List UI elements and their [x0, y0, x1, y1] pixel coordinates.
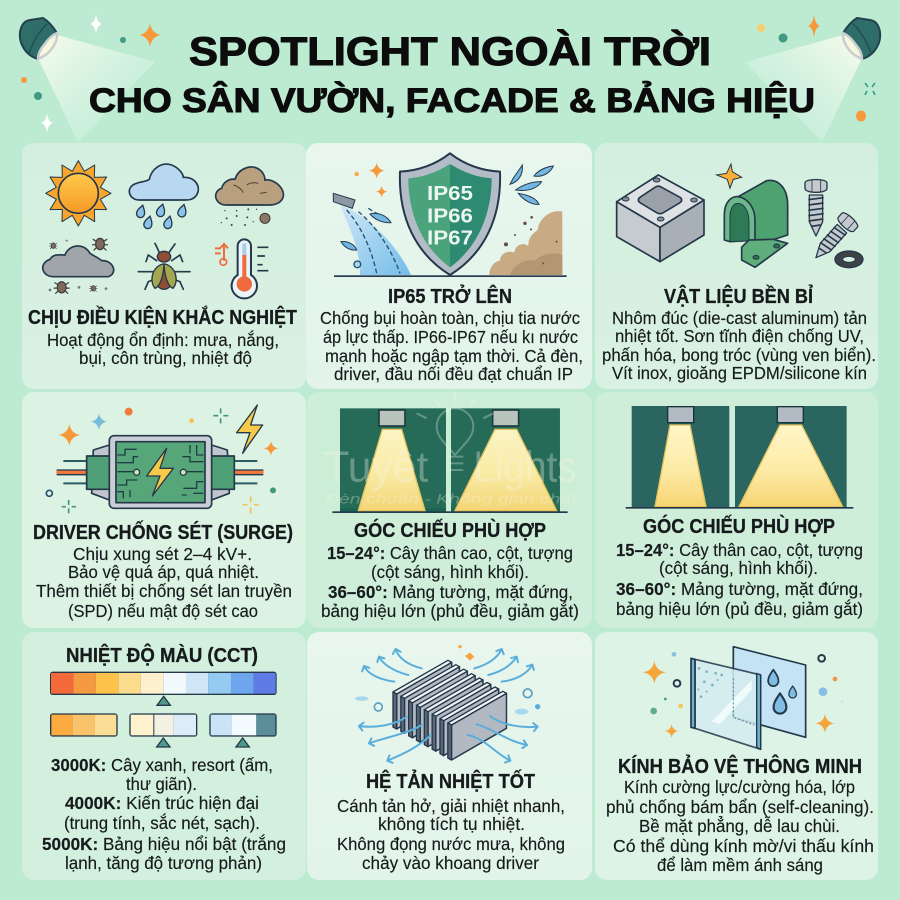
icon: shield	[400, 153, 500, 275]
watermark: Lights	[473, 443, 577, 492]
body text: để làm mềm ánh sáng	[657, 855, 823, 875]
body text: phấn hóa, bong tróc (vùng ven biển).	[602, 345, 876, 365]
body text	[321, 543, 579, 621]
body text	[320, 308, 583, 384]
body text: Chịu xung sét 2–4 kV+.	[73, 544, 252, 564]
icon: lightning bolt	[237, 405, 263, 453]
main color bar	[50, 672, 277, 705]
body text: không tích tụ nhiệt.	[378, 814, 525, 834]
icon: driver housing	[87, 436, 234, 508]
body text: lạnh, tăng độ tương phản)	[65, 853, 262, 873]
heading: VẬT LIỆU BỀN BỈ	[664, 284, 813, 308]
icon: shield: IP66	[427, 204, 473, 227]
body text: Bảo vệ quá áp, quá nhiệt.	[68, 562, 259, 582]
icon: shield: IP65	[427, 182, 473, 205]
body text: bảng hiệu lớn (phủ đều, giảm gắt)	[321, 600, 579, 621]
body text: Chống bụi hoàn toàn, chịu tia nước	[320, 308, 580, 328]
sparkles	[354, 163, 387, 197]
heading: KÍNH BẢO VỆ THÔNG MINH	[618, 754, 862, 778]
icon: star	[717, 164, 742, 188]
illustration: glass panes	[643, 647, 843, 749]
body text: thư giãn).	[126, 774, 197, 794]
body text: Hoạt động ổn định: mưa, nắng,	[47, 329, 279, 350]
watermark	[318, 392, 582, 508]
body text: áp lực thấp. IP66-IP67 nếu kı nước	[323, 327, 578, 347]
body text	[337, 796, 565, 873]
body text: Thêm thiết bị chống sét lan truyền	[36, 581, 292, 601]
sparkles left	[21, 13, 161, 133]
icon: dust mound	[489, 211, 562, 275]
body text	[602, 308, 876, 383]
title	[89, 28, 815, 120]
panel: IP rating	[306, 143, 592, 389]
icon: splash drops	[510, 165, 553, 204]
icon: back glass pane	[733, 647, 806, 737]
body text	[616, 540, 863, 619]
panel: durable materials	[595, 143, 878, 389]
left scene: narrow beam	[632, 406, 729, 507]
icon: gray cloud with pests	[43, 238, 114, 294]
CCT scale	[50, 672, 277, 747]
right scene: wide beam	[451, 408, 560, 512]
body text: 36–60°: Mảng tường, mặt đứng,	[328, 582, 573, 602]
illustration: materials	[617, 164, 863, 268]
heading: HỆ TẢN NHIỆT TỐT	[366, 769, 535, 793]
body text: Kính cường lực/cường hóa, lớp	[624, 777, 855, 797]
body text	[606, 777, 874, 875]
icon: sun	[46, 161, 111, 226]
body text: (trung tính, sắc nét, sạch).	[64, 812, 260, 833]
icon: center lightning	[147, 448, 173, 496]
illustration: driver	[46, 405, 278, 513]
body text: mạnh hoặc ngập tạm thời. Cả đèn,	[325, 346, 583, 366]
sparkles	[643, 652, 843, 738]
icon: right spotlight	[745, 18, 880, 142]
body text: 15–24°: Cây thân cao, cột, tượng	[327, 543, 573, 563]
icon: front glass pane	[691, 658, 761, 749]
decor: bubbles	[355, 645, 540, 715]
heading: GÓC CHIẾU PHÙ HỢP	[643, 514, 835, 538]
body text: 5000K: Bảng hiệu nổi bật (trắng	[42, 833, 286, 854]
heading: CHỊU ĐIỀU KIỆN KHẮC NGHIỆT	[28, 305, 297, 329]
body text: Vít inox, gioăng EPDM/silicone kín	[612, 363, 867, 383]
4000K bar	[129, 713, 197, 747]
body text: 3000K: Cây xanh, resort (ấm,	[51, 755, 273, 775]
left scene: narrow beam	[340, 408, 446, 512]
right scene: wide beam	[735, 406, 847, 507]
icon: dust cloud	[216, 167, 283, 226]
title: CHO SÂN VƯỜN, FACADE & BẢNG HIỆU	[89, 82, 815, 120]
body text: (cột sáng, hình khối).	[659, 558, 818, 578]
watermark: Tuyêt	[323, 443, 428, 492]
body text: 36–60°: Mảng tường, mặt đứng,	[616, 579, 863, 599]
body text: (cột sáng, hình khối).	[371, 562, 529, 582]
icon: wires	[57, 461, 263, 483]
body text: Không đọng nước mưa, không	[337, 834, 565, 854]
watermark: Đèn chuẩn - Không gian chất	[325, 490, 578, 506]
icon: shield: IP67	[427, 226, 473, 249]
icon: thermometer	[215, 239, 268, 298]
icon: heat sink fins	[393, 660, 506, 760]
panel: extreme conditions	[22, 143, 306, 389]
illustration: beam angles	[318, 392, 582, 513]
heading: NHIỆT ĐỘ MÀU (CCT)	[66, 643, 258, 667]
body text: driver, đầu nối đều đạt chuẩn IP	[334, 364, 573, 384]
body text	[36, 544, 292, 621]
panel: surge driver	[22, 392, 306, 628]
header decoration	[20, 13, 880, 142]
icon: screws	[805, 179, 863, 268]
body text: bụi, côn trùng, nhiệt độ	[79, 348, 252, 368]
sparkles right	[757, 14, 875, 122]
body text: Có thể dùng kính mờ/vi thấu kính	[613, 836, 874, 856]
body text: 15–24°: Cây thân cao, cột, tượng	[616, 540, 863, 560]
body text: (SPD) nếu mật độ sét cao	[68, 601, 258, 621]
icon: circuit traces	[117, 445, 203, 498]
body text: phủ chống bám bẩn (self-cleaning).	[606, 797, 874, 817]
body text: Bề mặt phẳng, dễ lau chùi.	[639, 815, 840, 836]
panel: beam angle with watermark	[307, 392, 592, 628]
title: SPOTLIGHT NGOÀI TRỜI	[189, 28, 711, 74]
illustration: heat sink	[355, 645, 540, 761]
heading: IP65 TRỞ LÊN	[388, 284, 512, 308]
5000K bar	[209, 713, 277, 747]
icon: rain cloud	[129, 164, 198, 229]
body text: bảng hiệu lớn (pủ đều, giảm gắt)	[616, 598, 863, 619]
illustration: IP shield with water and dust	[333, 153, 567, 277]
illustration: beam angles	[626, 406, 853, 509]
panel: color temperature	[22, 632, 306, 880]
panel: beam angle	[595, 392, 878, 628]
sparkles	[46, 408, 278, 513]
icon: die-cast block	[617, 175, 704, 262]
heading: DRIVER CHỐNG SÉT (SURGE)	[33, 520, 293, 544]
icon: left spotlight	[20, 18, 155, 142]
body text	[42, 755, 286, 873]
body text: Nhôm đúc (die-cast aluminum) tản	[612, 308, 867, 328]
icon: green bracket	[724, 180, 788, 267]
icon: beetle	[138, 243, 190, 289]
body text: 4000K: Kiến trúc hiện đại	[65, 793, 259, 813]
icons: weather set	[43, 161, 283, 298]
heading: GÓC CHIẾU PHÙ HỢP	[354, 518, 546, 542]
panel: heat sink	[307, 632, 592, 880]
body text	[47, 329, 279, 368]
icon: water jet	[333, 193, 411, 275]
3000K bar	[50, 713, 118, 737]
icon: airflow arrows	[359, 649, 538, 761]
body text: nhiệt tốt. Sơn tĩnh điện chống UV,	[615, 326, 864, 346]
panel: smart glass	[595, 632, 878, 880]
body text: chảy vào khoang driver	[362, 853, 539, 873]
body text: Cánh tản hở, giải nhiệt nhanh,	[337, 796, 565, 816]
